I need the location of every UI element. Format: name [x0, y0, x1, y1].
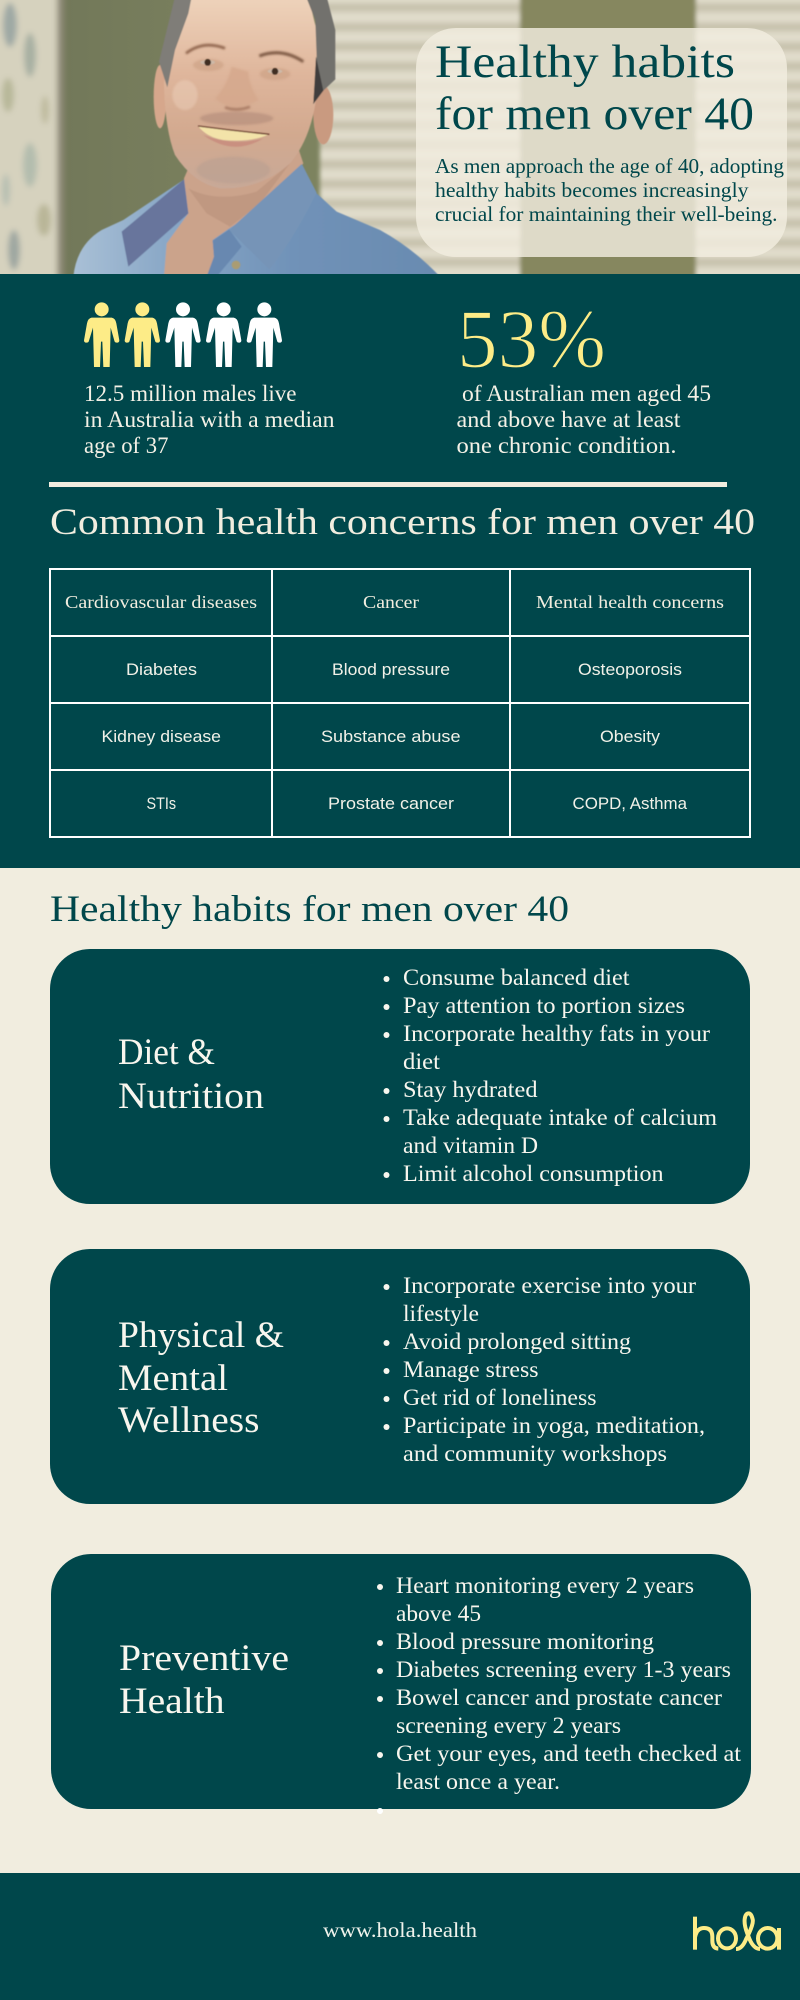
bullet list: Incorporate exercise into your	[403, 1273, 696, 1298]
table row 3: Obesity	[600, 728, 661, 746]
footer website: www.hola.health	[323, 1918, 478, 1942]
shirt button	[232, 261, 240, 269]
panel title: Preventive	[119, 1638, 289, 1679]
bullet list: least once a year.	[396, 1769, 560, 1794]
cheek and mouth shading	[200, 112, 273, 125]
bullet list: above 45	[396, 1601, 481, 1626]
table row 4: COPD, Asthma	[572, 795, 688, 813]
table row 3: Substance abuse	[321, 728, 460, 746]
intro text: crucial for maintaining their well-being.	[435, 202, 778, 226]
bullet list	[377, 1573, 742, 1814]
bullet list: Bowel cancer and prostate cancer	[396, 1685, 722, 1710]
ears	[154, 65, 166, 128]
stat text: chronic condition: of Australian men aged 45	[462, 381, 711, 406]
table row 4	[146, 795, 688, 813]
panel: preventive health	[51, 1554, 751, 1814]
icon: five male figures	[84, 302, 282, 367]
stat text: population: age of 37	[84, 433, 168, 458]
panel: physical and mental wellness	[50, 1249, 750, 1504]
bullet list: Consume balanced diet	[403, 965, 630, 990]
main title	[435, 36, 754, 140]
table row 1	[65, 592, 724, 612]
panel title	[118, 1315, 284, 1441]
stat text: population: in Australia with a median	[84, 407, 335, 432]
hero photo: smiling man	[0, 0, 800, 284]
lower lip	[203, 135, 263, 147]
panel title: Health	[119, 1681, 225, 1722]
footer band	[0, 1873, 800, 2000]
panel title: Diet &	[118, 1032, 215, 1073]
bullet list: Participate in yoga, meditation,	[403, 1413, 705, 1438]
collar right	[229, 164, 317, 269]
bullet list	[384, 1273, 705, 1466]
table row 4: Prostate cancer	[328, 795, 455, 813]
table row 2	[126, 661, 682, 679]
bullet list: and vitamin D	[403, 1133, 538, 1158]
bullet list: screening every 2 years	[396, 1713, 621, 1738]
placket	[207, 229, 242, 277]
heading: common health concerns: Common health concerns for men over 40	[50, 502, 755, 543]
bullet list: Blood pressure monitoring	[396, 1629, 655, 1654]
table row 1: Cancer	[363, 592, 419, 612]
panel title: Physical &	[118, 1315, 284, 1356]
stat text: chronic condition: one chronic condition.	[456, 433, 676, 458]
bullet list: Heart monitoring every 2 years	[396, 1573, 694, 1598]
big number: 53%: 53%	[457, 293, 606, 386]
bullet list: Get rid of loneliness	[403, 1385, 597, 1410]
bullet list: Limit alcohol consumption	[403, 1161, 664, 1186]
bullet list: Take adequate intake of calcium	[403, 1105, 717, 1130]
panel: diet and nutrition	[50, 949, 750, 1204]
table row 2: Osteoporosis	[578, 661, 682, 679]
face	[164, 0, 317, 188]
stat text: population	[84, 381, 335, 458]
hair right	[306, 0, 335, 104]
panel title: Mental	[118, 1358, 228, 1399]
nose	[215, 67, 258, 107]
stat text: chronic condition: and above have at least	[456, 407, 681, 432]
bullet list: Diabetes screening every 1-3 years	[396, 1657, 731, 1682]
bullet list: lifestyle	[403, 1301, 479, 1326]
neck	[164, 133, 303, 277]
bullet list: Manage stress	[403, 1357, 539, 1382]
hero title card	[416, 28, 787, 257]
panel title: Wellness	[118, 1400, 260, 1441]
hair left	[159, 0, 192, 87]
bullet list: diet	[403, 1049, 441, 1074]
table row 3	[102, 728, 661, 746]
stat text: population: 12.5 million males live	[84, 381, 296, 406]
intro text: As men approach the age of 40, adopting	[435, 154, 784, 178]
teeth	[198, 126, 269, 141]
logo: hola	[695, 1913, 779, 1950]
table row 2: Blood pressure	[332, 661, 450, 679]
eyes	[200, 60, 215, 65]
panel title: Nutrition	[118, 1076, 264, 1117]
panel title	[118, 1032, 264, 1117]
panel: dark statistics and concerns band	[0, 274, 800, 868]
eye sockets and brows	[186, 45, 225, 53]
main title: for men over 40	[435, 88, 754, 140]
bullet list	[384, 965, 717, 1186]
bullet list: Incorporate healthy fats in your	[403, 1021, 710, 1046]
heading: healthy habits section: Healthy habits for men over 40	[50, 889, 569, 930]
table row 3: Kidney disease	[102, 728, 221, 746]
main title: Healthy habits	[435, 36, 735, 88]
table row 2: Diabetes	[126, 661, 197, 679]
collar left	[122, 179, 188, 267]
bullet list: Pay attention to portion sizes	[403, 993, 685, 1018]
stat text: chronic condition	[456, 381, 711, 458]
bullet list: and community workshops	[403, 1441, 667, 1466]
bullet list: Get your eyes, and teeth checked at	[396, 1741, 742, 1766]
table row 4: STIs	[146, 795, 176, 813]
intro text	[435, 154, 784, 226]
bullet list: Avoid prolonged sitting	[403, 1329, 632, 1354]
table: health concerns grid	[50, 569, 750, 837]
table row 1: Cardiovascular diseases	[65, 592, 257, 612]
shirt body	[73, 163, 440, 277]
intro text: healthy habits becomes increasingly	[435, 178, 749, 202]
table row 1: Mental health concerns	[536, 592, 724, 612]
panel title	[119, 1638, 289, 1722]
bullet list: Stay hydrated	[403, 1077, 538, 1102]
